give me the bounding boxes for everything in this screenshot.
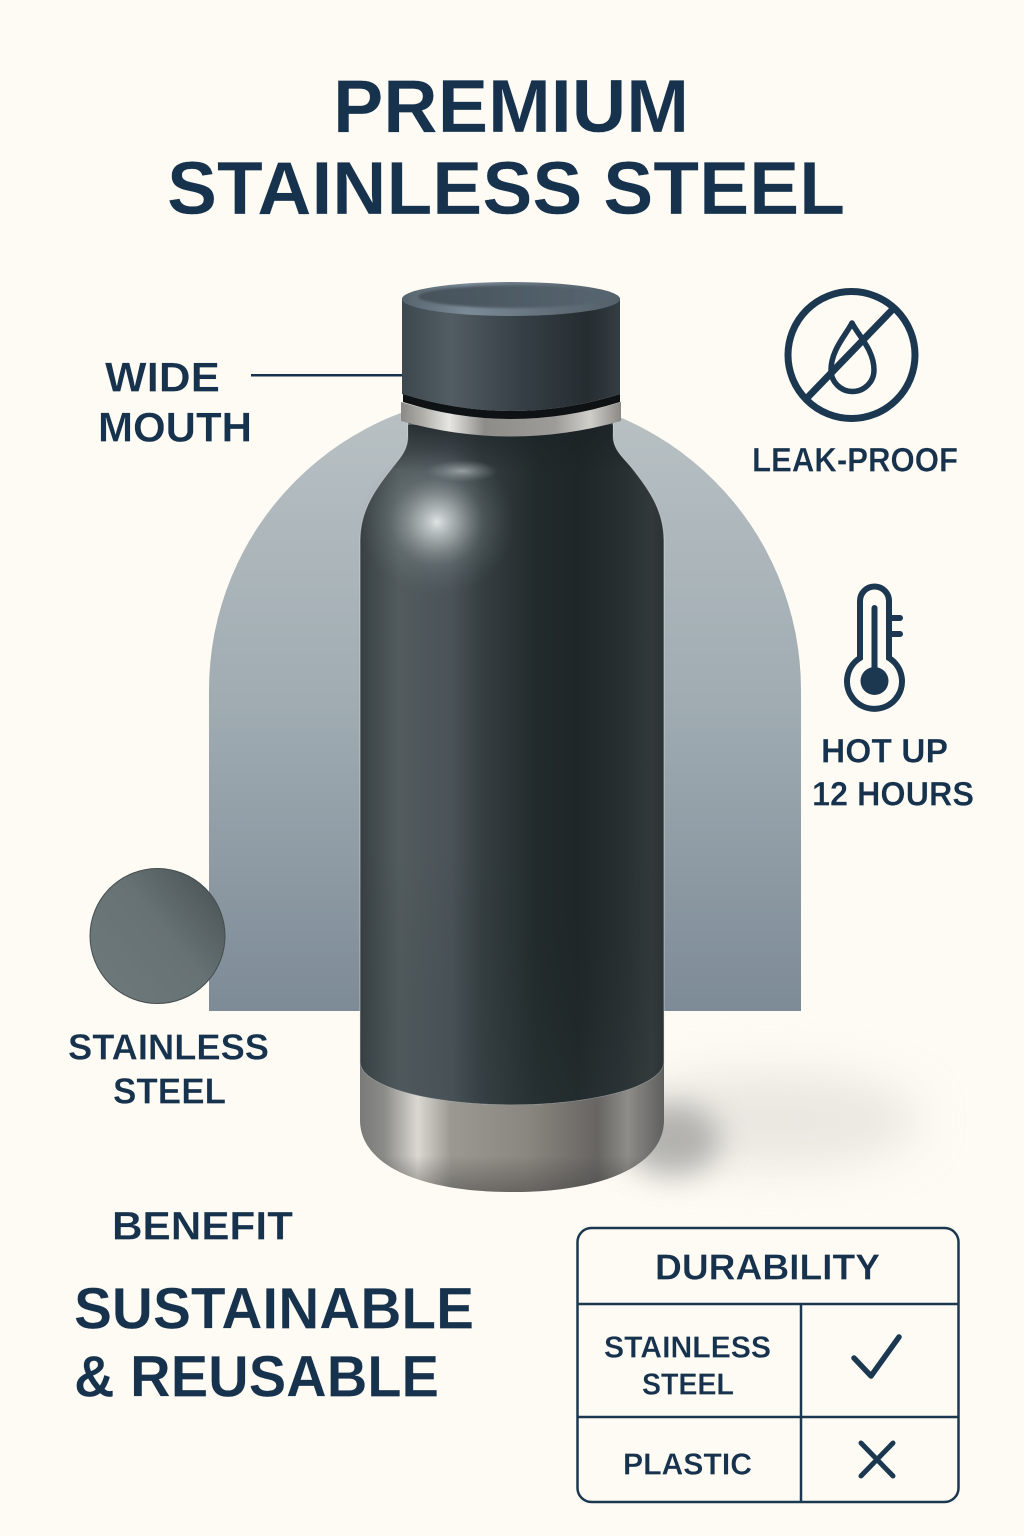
shoulder shadow under ring	[392, 425, 632, 473]
benefit statement: & REUSABLE	[74, 1344, 439, 1410]
cap recessed top	[418, 285, 610, 308]
benefit statement: SUSTAINABLE	[74, 1276, 474, 1342]
benefit block	[74, 1204, 474, 1410]
wide mouth leader line	[251, 374, 402, 376]
hot up 12 hours label: 12 HOURS	[812, 776, 974, 814]
cap side	[402, 298, 620, 411]
title: STAINLESS STEEL	[167, 146, 845, 230]
table header: DURABILITY	[655, 1246, 880, 1288]
row label: stainless steel: STEEL	[642, 1366, 734, 1402]
hot up 12 hours label: HOT UP	[821, 732, 948, 770]
wide mouth label: MOUTH	[98, 404, 252, 450]
body highlight	[359, 448, 515, 596]
icon: check mark	[854, 1337, 899, 1376]
background arch	[209, 394, 801, 1011]
contact shadow	[624, 1104, 720, 1176]
wide mouth label: WIDE	[105, 354, 220, 400]
wide mouth label	[98, 354, 252, 450]
icon: cross mark	[861, 1443, 893, 1476]
icon: thermometer	[847, 586, 902, 709]
cap top rim	[402, 282, 620, 316]
stainless steel swatch	[90, 868, 225, 1004]
black gasket	[403, 394, 620, 419]
row label: plastic: PLASTIC	[623, 1446, 752, 1482]
row label: stainless steel: STAINLESS	[604, 1330, 771, 1364]
benefit statement	[74, 1276, 474, 1410]
body low tint	[360, 540, 664, 1105]
title	[167, 64, 845, 230]
icon: leak-proof drop	[788, 292, 915, 418]
stainless steel label: STAINLESS	[68, 1026, 269, 1068]
stainless steel label: STEEL	[113, 1070, 226, 1112]
benefit heading: BENEFIT	[112, 1204, 293, 1248]
bottle body	[360, 420, 664, 1105]
hot up 12 hours label	[812, 732, 974, 814]
row label: stainless steel	[604, 1330, 771, 1402]
stainless steel label	[68, 1026, 269, 1112]
steel base	[360, 1062, 664, 1192]
base lower shading	[360, 1062, 664, 1192]
leak-proof label: LEAK-PROOF	[752, 442, 958, 480]
bottle	[359, 282, 664, 1192]
wide soft shadow	[620, 1072, 920, 1168]
table frame	[578, 1228, 958, 1502]
upper shoulder glint	[426, 460, 498, 482]
title: PREMIUM	[333, 64, 689, 148]
steel neck ring	[401, 402, 621, 436]
durability comparison table	[578, 1228, 958, 1502]
